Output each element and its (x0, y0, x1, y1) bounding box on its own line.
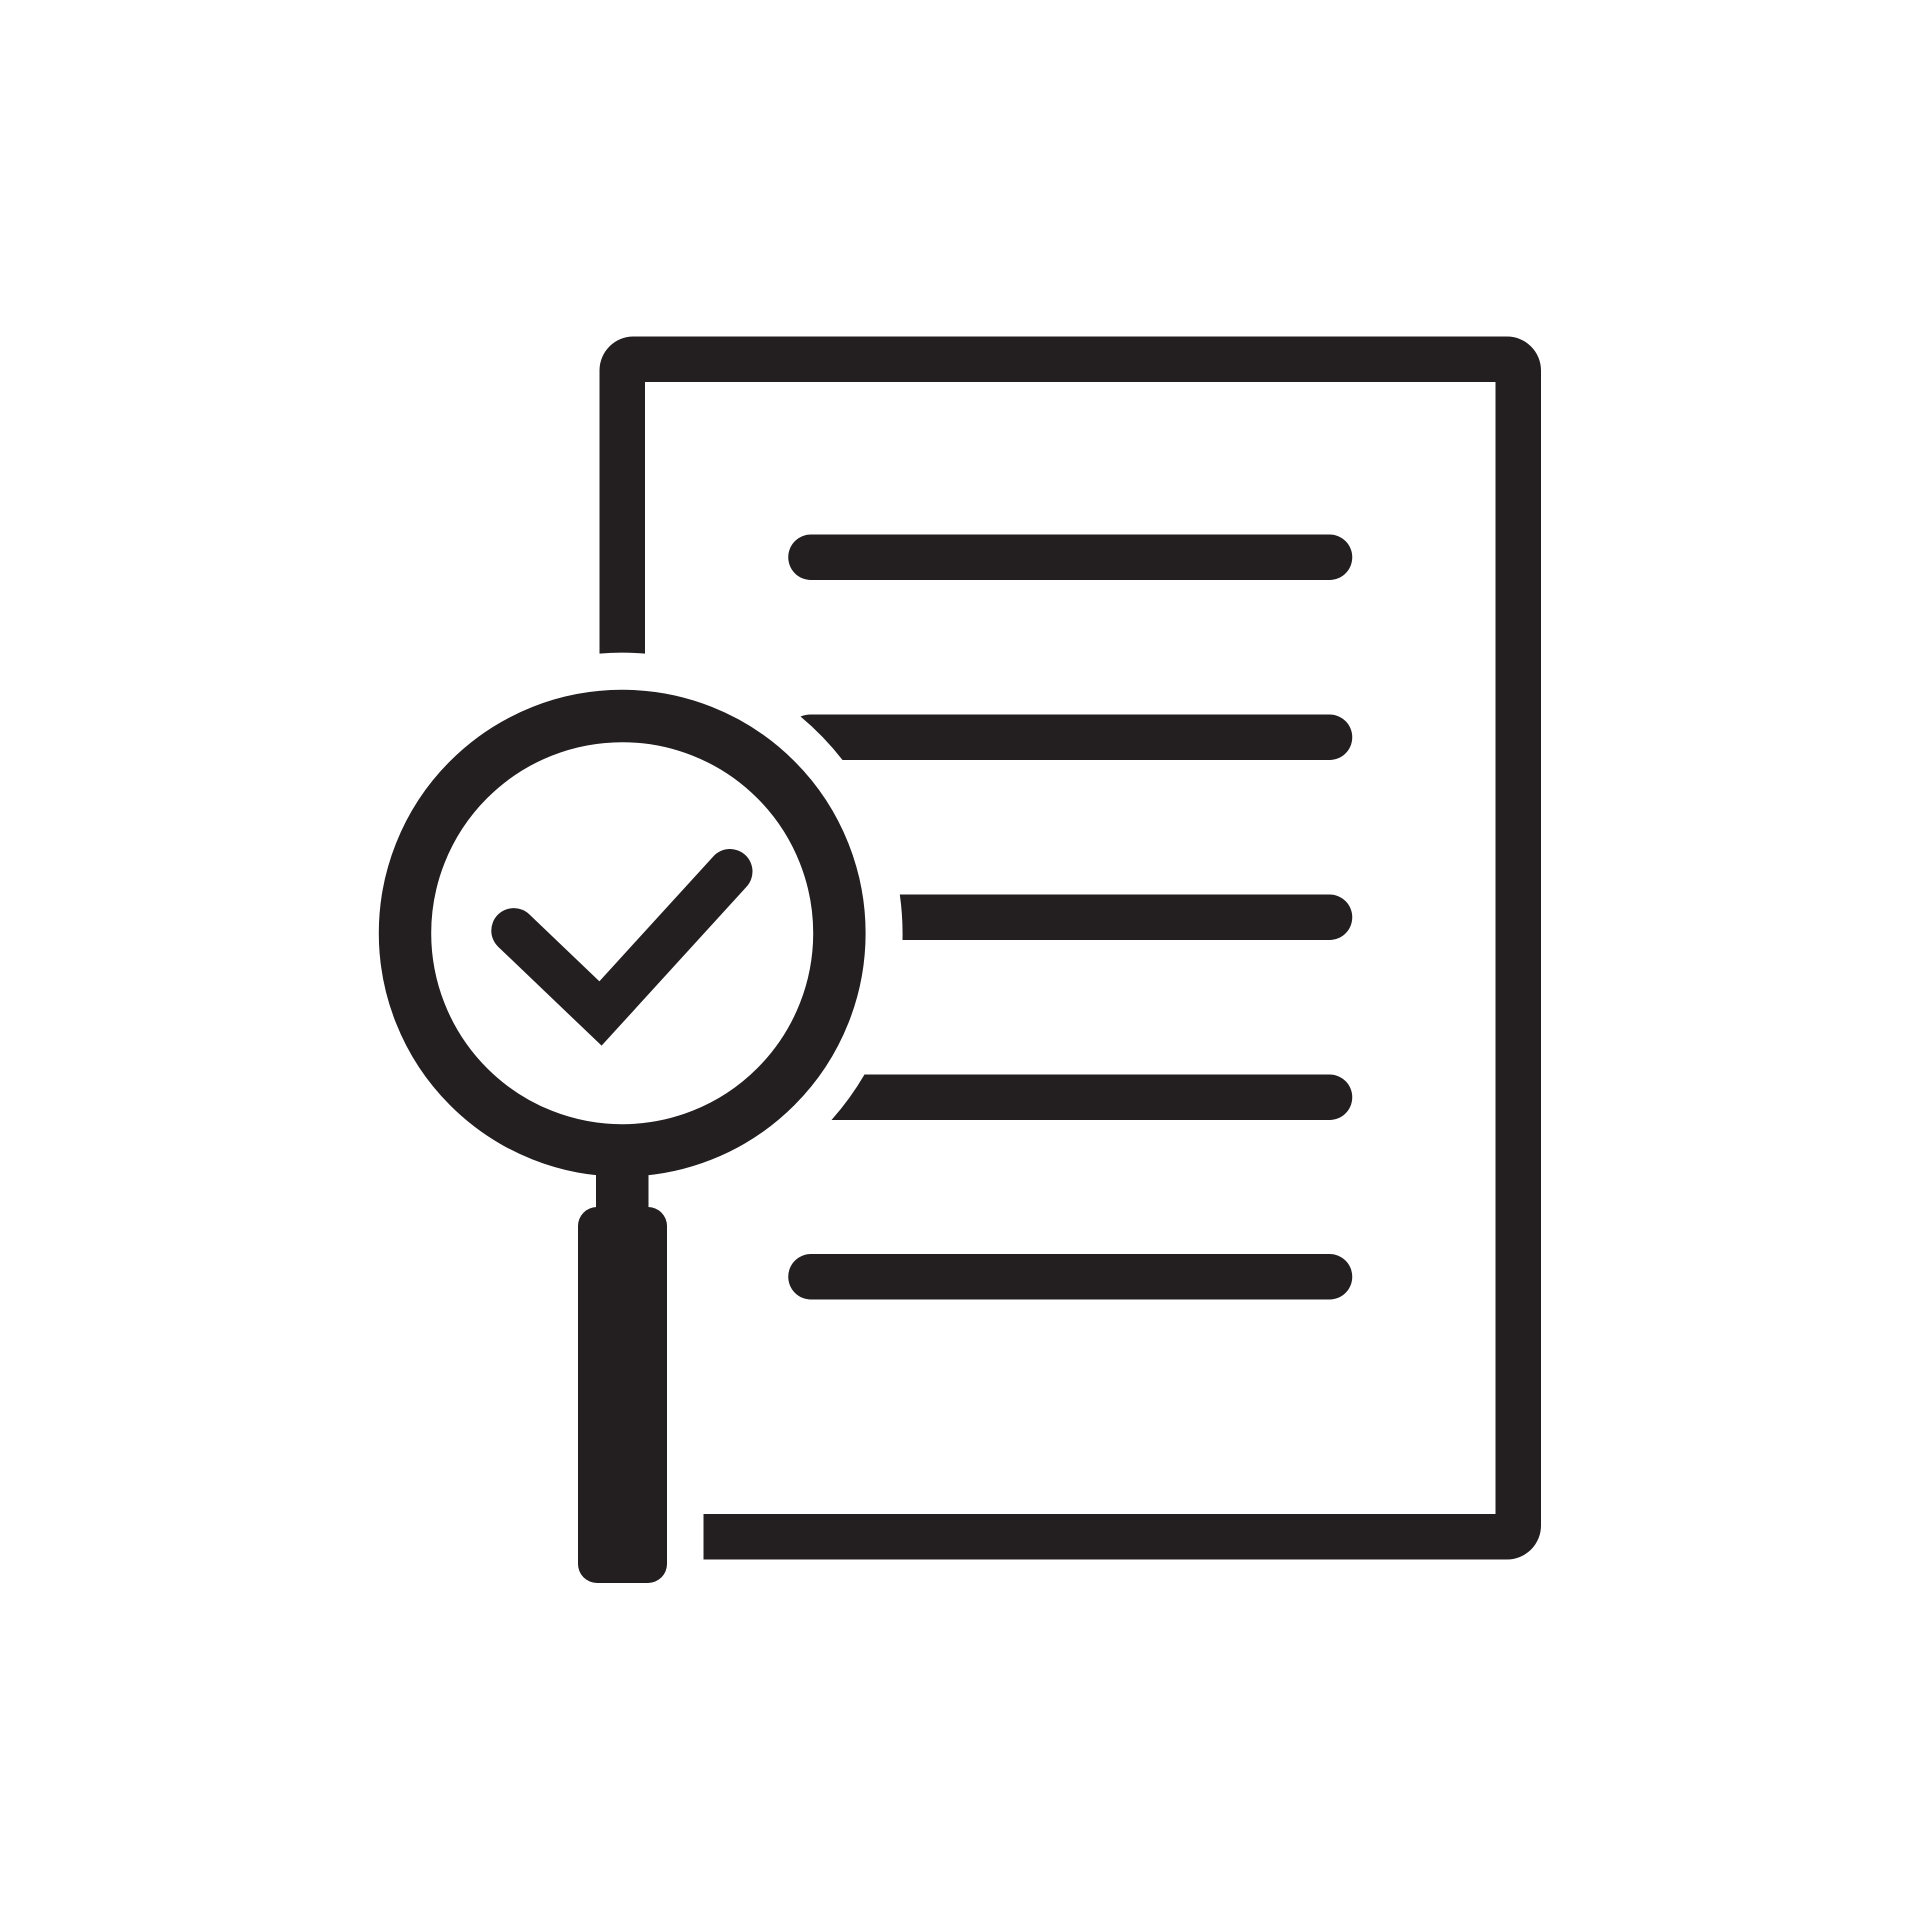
icon: magnifying glass (405, 716, 839, 1583)
icon: check mark (514, 872, 730, 1014)
icon: document outline (600, 336, 1541, 1560)
line 2 clipped by magnifier (800, 714, 1352, 760)
line 4 clipped by magnifier (832, 1074, 1352, 1120)
magnifier lens ring (405, 716, 839, 1150)
text lines on document (788, 534, 1352, 1300)
line 3 clipped by magnifier (900, 894, 1352, 940)
magnifier handle (578, 1207, 667, 1583)
magnifier neck (596, 1170, 648, 1220)
line 1 (788, 534, 1352, 580)
line 5 (788, 1254, 1352, 1300)
